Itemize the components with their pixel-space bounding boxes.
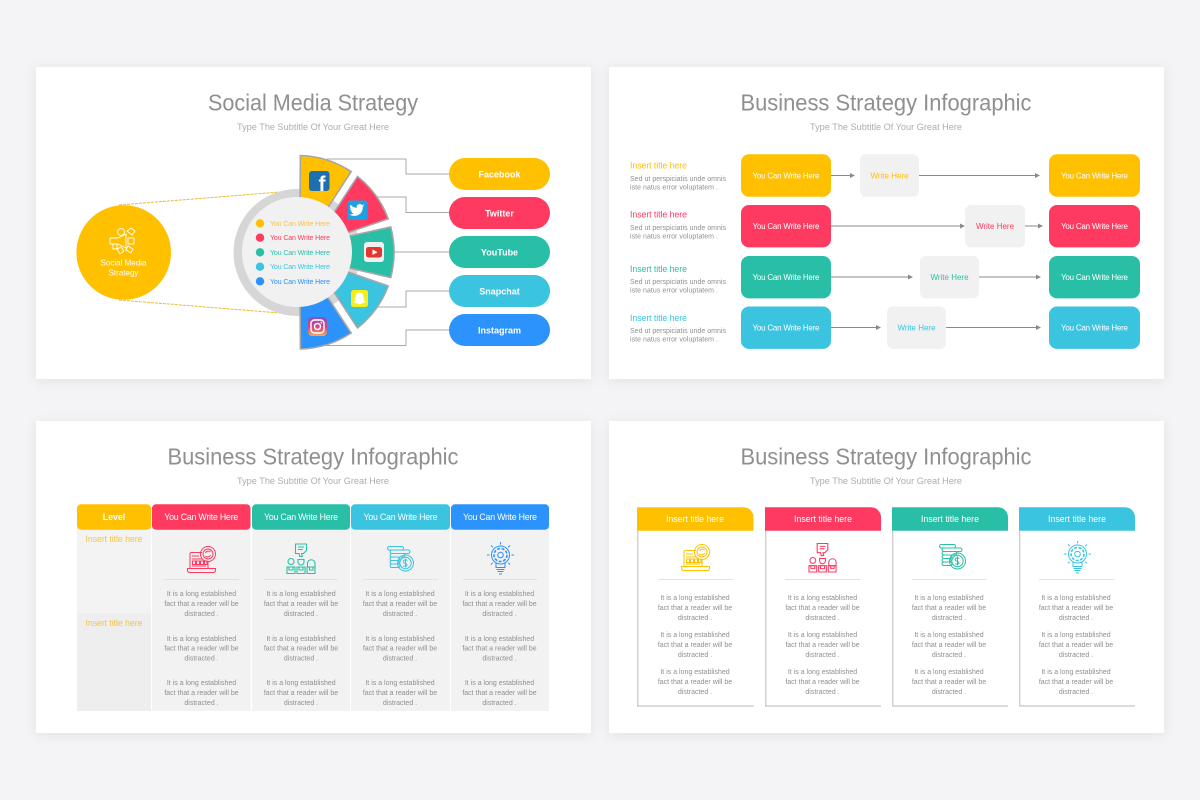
column 4: distracted . bbox=[482, 656, 517, 663]
subtitle: Type The Subtitle Of Your Great Here bbox=[810, 122, 962, 133]
panel: business strategy flow bbox=[609, 67, 1164, 379]
pill: instagram: Instagram bbox=[478, 325, 521, 335]
pill: twitter bbox=[449, 197, 550, 229]
panel: business strategy table bbox=[36, 421, 591, 733]
card 1: It is a long established bbox=[660, 595, 730, 602]
circle label: Social Media bbox=[101, 258, 147, 268]
card 2: distracted . bbox=[805, 689, 840, 696]
card 4: It is a long established bbox=[1041, 595, 1111, 602]
card 4: fact that a reader will be bbox=[1039, 605, 1113, 612]
row 1 text: Sed ut perspiciatis unde omnis bbox=[630, 176, 726, 183]
card 1: It is a long established bbox=[660, 669, 730, 676]
panel: business strategy cards bbox=[609, 421, 1164, 733]
card 2: It is a long established bbox=[788, 632, 857, 639]
card 4: Insert title here bbox=[1048, 514, 1106, 524]
column 4: distracted . bbox=[482, 700, 517, 707]
heading: Business Strategy Infographic bbox=[740, 444, 1032, 470]
heading: Business Strategy Infographic bbox=[740, 90, 1032, 116]
wedge: instagram bbox=[300, 293, 351, 349]
card 4: fact that a reader will be bbox=[1039, 679, 1113, 686]
row 2 text: Insert title here bbox=[630, 210, 687, 220]
icon: coins bbox=[388, 546, 414, 571]
column 1: fact that a reader will be bbox=[164, 646, 239, 653]
inner circle bbox=[242, 197, 352, 307]
wedge: twitter bbox=[332, 176, 388, 234]
card 2: It is a long established bbox=[788, 669, 857, 676]
row 4 boxes: You Can Write Here bbox=[752, 323, 820, 332]
column 4: distracted . bbox=[482, 611, 517, 618]
icon: people bbox=[287, 544, 315, 574]
row 1 boxes: You Can Write Here bbox=[752, 172, 820, 180]
row 3 text: iste natus error voluptatem . bbox=[630, 288, 718, 294]
card 1: It is a long established bbox=[660, 632, 730, 639]
icon: coins bbox=[940, 544, 966, 569]
column 2: fact that a reader will be bbox=[264, 690, 338, 697]
row 1 text bbox=[630, 160, 726, 192]
card 4: distracted . bbox=[1059, 615, 1093, 622]
card 3: distracted . bbox=[932, 615, 966, 622]
card 3: fact that a reader will be bbox=[912, 679, 986, 686]
column 3: fact that a reader will be bbox=[363, 601, 437, 608]
column 2: distracted . bbox=[284, 700, 318, 707]
row 4 boxes bbox=[741, 306, 1140, 349]
heading: Business Strategy Infographic bbox=[168, 444, 458, 470]
column 4 bbox=[451, 504, 549, 711]
card 1: fact that a reader will be bbox=[658, 642, 732, 649]
wedge: youtube bbox=[345, 227, 394, 278]
row 2 boxes: Write Here bbox=[976, 222, 1015, 231]
grey ring bbox=[234, 189, 360, 316]
column 2: It is a long established bbox=[266, 636, 336, 643]
icon: instagram bbox=[308, 317, 327, 336]
column 2: You Can Write Here bbox=[264, 512, 338, 522]
list inside circle bbox=[256, 219, 330, 286]
column 1: distracted . bbox=[184, 700, 219, 707]
subtitle: Type The Subtitle Of Your Great Here bbox=[237, 122, 389, 133]
column 4: fact that a reader will be bbox=[462, 601, 537, 608]
card 1: Insert title here bbox=[666, 514, 724, 524]
column 3: fact that a reader will be bbox=[363, 690, 437, 697]
row 4 text bbox=[630, 313, 726, 344]
card 3: distracted . bbox=[932, 652, 966, 659]
column 2: fact that a reader will be bbox=[264, 646, 338, 653]
card 4: fact that a reader will be bbox=[1039, 642, 1113, 649]
column 4: fact that a reader will be bbox=[462, 690, 537, 697]
card 3: fact that a reader will be bbox=[912, 605, 986, 612]
row 4 text: Insert title here bbox=[630, 313, 687, 323]
pill: snapchat bbox=[449, 275, 550, 307]
row 2 text: iste natus error voluptatem . bbox=[630, 234, 718, 240]
card 1: distracted . bbox=[678, 615, 712, 622]
column 3: It is a long established bbox=[365, 591, 435, 598]
card 2: fact that a reader will be bbox=[785, 605, 860, 612]
column 1: distracted . bbox=[184, 656, 219, 663]
row 3 text: Insert title here bbox=[630, 264, 687, 274]
row 4 boxes: Write Here bbox=[897, 323, 936, 332]
icon: megaphone bbox=[110, 228, 135, 254]
pill: youtube bbox=[449, 236, 550, 268]
column 1: It is a long established bbox=[167, 591, 236, 598]
column 1: You Can Write Here bbox=[164, 512, 238, 522]
row 4 text: Sed ut perspiciatis unde omnis bbox=[630, 328, 726, 335]
card 4: It is a long established bbox=[1041, 669, 1111, 676]
connector lines bbox=[320, 159, 449, 346]
row 2 boxes: You Can Write Here bbox=[1061, 222, 1129, 231]
row 1 boxes: You Can Write Here bbox=[1061, 172, 1129, 180]
card 3: It is a long established bbox=[914, 669, 984, 676]
row 2 boxes: You Can Write Here bbox=[752, 222, 820, 231]
column 4: It is a long established bbox=[465, 591, 534, 598]
card 1: distracted . bbox=[678, 689, 712, 696]
column 2 bbox=[252, 504, 350, 711]
icon: lightbulb bbox=[487, 542, 514, 574]
panel: social media strategy bbox=[36, 67, 591, 379]
card 1: fact that a reader will be bbox=[658, 679, 732, 686]
row 1 boxes: Write Here bbox=[870, 172, 909, 180]
card 1: fact that a reader will be bbox=[658, 605, 732, 612]
row 3 text bbox=[630, 264, 726, 294]
icon: lightbulb bbox=[1064, 541, 1091, 573]
row 2 text: Sed ut perspiciatis unde omnis bbox=[630, 225, 726, 232]
icon: facebook: f bbox=[318, 173, 326, 196]
column 2: distracted . bbox=[284, 656, 318, 663]
subtitle: Type The Subtitle Of Your Great Here bbox=[810, 476, 962, 487]
column 3: It is a long established bbox=[365, 680, 435, 687]
subtitle: Type The Subtitle Of Your Great Here bbox=[237, 476, 389, 487]
column 1: fact that a reader will be bbox=[164, 690, 239, 697]
pill: youtube: YouTube bbox=[481, 247, 518, 257]
list inside circle: You Can Write Here bbox=[270, 221, 330, 228]
card 2: distracted . bbox=[805, 652, 840, 659]
card 2: fact that a reader will be bbox=[785, 679, 860, 686]
column 1 bbox=[152, 504, 250, 711]
column 4: It is a long established bbox=[465, 680, 534, 687]
card 3 bbox=[892, 507, 1008, 706]
row 3 boxes: Write Here bbox=[930, 273, 969, 282]
column 2: It is a long established bbox=[266, 680, 336, 687]
level column: Insert title here bbox=[86, 534, 143, 544]
card 3: It is a long established bbox=[914, 595, 984, 602]
row 1 text: Insert title here bbox=[630, 160, 687, 170]
row 3 boxes bbox=[741, 256, 1140, 298]
pill: twitter: Twitter bbox=[485, 208, 514, 218]
column 3: distracted . bbox=[383, 700, 417, 707]
yellow circle with icon bbox=[76, 205, 171, 300]
column 1: distracted . bbox=[184, 611, 219, 618]
card 2: Insert title here bbox=[794, 514, 852, 524]
card 2 bbox=[765, 507, 881, 706]
level column: Insert title here bbox=[86, 618, 143, 628]
card 3: It is a long established bbox=[914, 632, 984, 639]
column 3: distracted . bbox=[383, 656, 417, 663]
column 3: fact that a reader will be bbox=[363, 646, 437, 653]
wedge: snapchat bbox=[332, 270, 388, 328]
arrows bbox=[831, 173, 1043, 330]
dashed connector lines bbox=[119, 192, 280, 313]
wedge: facebook bbox=[300, 156, 351, 212]
list inside circle: You Can Write Here bbox=[270, 279, 330, 286]
card 4: It is a long established bbox=[1041, 632, 1111, 639]
card 1: distracted . bbox=[678, 652, 712, 659]
level column: Level bbox=[103, 512, 125, 522]
icon: facebook bbox=[309, 171, 330, 196]
column 1: It is a long established bbox=[167, 680, 236, 687]
column 3: distracted . bbox=[383, 611, 417, 618]
icon: laptop bbox=[682, 544, 710, 570]
list inside circle: You Can Write Here bbox=[270, 250, 330, 257]
circle label bbox=[101, 258, 147, 278]
row 4 boxes: You Can Write Here bbox=[1061, 323, 1129, 332]
column 4: fact that a reader will be bbox=[462, 646, 537, 653]
icon: snapchat bbox=[351, 290, 368, 307]
list inside circle: You Can Write Here bbox=[270, 235, 330, 242]
column 3 bbox=[351, 504, 450, 711]
list inside circle: You Can Write Here bbox=[270, 264, 330, 271]
card 3: Insert title here bbox=[921, 514, 979, 524]
card 3: fact that a reader will be bbox=[912, 642, 986, 649]
icon: youtube bbox=[364, 242, 384, 262]
column 1: It is a long established bbox=[167, 636, 236, 643]
column 2: It is a long established bbox=[266, 591, 336, 598]
row 4 text: iste natus error voluptatem . bbox=[630, 336, 718, 344]
column 3: It is a long established bbox=[365, 636, 435, 643]
row 2 text bbox=[630, 210, 726, 240]
level column bbox=[77, 504, 151, 711]
icon: people bbox=[809, 543, 836, 572]
column 2: distracted . bbox=[284, 611, 318, 618]
heading: social media strategy: Social Media Strategy bbox=[208, 90, 418, 116]
icon: twitter bbox=[348, 200, 368, 220]
row 2 boxes bbox=[741, 205, 1140, 247]
row 3 text: Sed ut perspiciatis unde omnis bbox=[630, 279, 726, 286]
row 1 text: iste natus error voluptatem . bbox=[630, 184, 718, 192]
row 1 boxes bbox=[741, 154, 1140, 197]
circle label: Strategy bbox=[109, 268, 138, 278]
row 3 boxes: You Can Write Here bbox=[752, 273, 820, 282]
icon: laptop bbox=[188, 546, 216, 572]
card 2: distracted . bbox=[805, 615, 840, 622]
column 1: fact that a reader will be bbox=[164, 601, 239, 608]
column 3: You Can Write Here bbox=[364, 512, 438, 522]
pill: instagram bbox=[449, 314, 550, 346]
column 2: fact that a reader will be bbox=[264, 601, 338, 608]
pill: facebook bbox=[449, 158, 550, 190]
card 1 bbox=[637, 507, 754, 706]
card 2: It is a long established bbox=[788, 595, 857, 602]
pill: snapchat: Snapchat bbox=[479, 286, 520, 296]
column 4: It is a long established bbox=[465, 636, 534, 643]
pill: facebook: Facebook bbox=[478, 169, 521, 179]
card 4: distracted . bbox=[1059, 652, 1093, 659]
column 4: You Can Write Here bbox=[463, 512, 537, 522]
row 3 boxes: You Can Write Here bbox=[1061, 273, 1129, 282]
card 2: fact that a reader will be bbox=[785, 642, 860, 649]
card 4 bbox=[1019, 507, 1135, 706]
card 4: distracted . bbox=[1059, 689, 1093, 696]
card 3: distracted . bbox=[932, 689, 966, 696]
